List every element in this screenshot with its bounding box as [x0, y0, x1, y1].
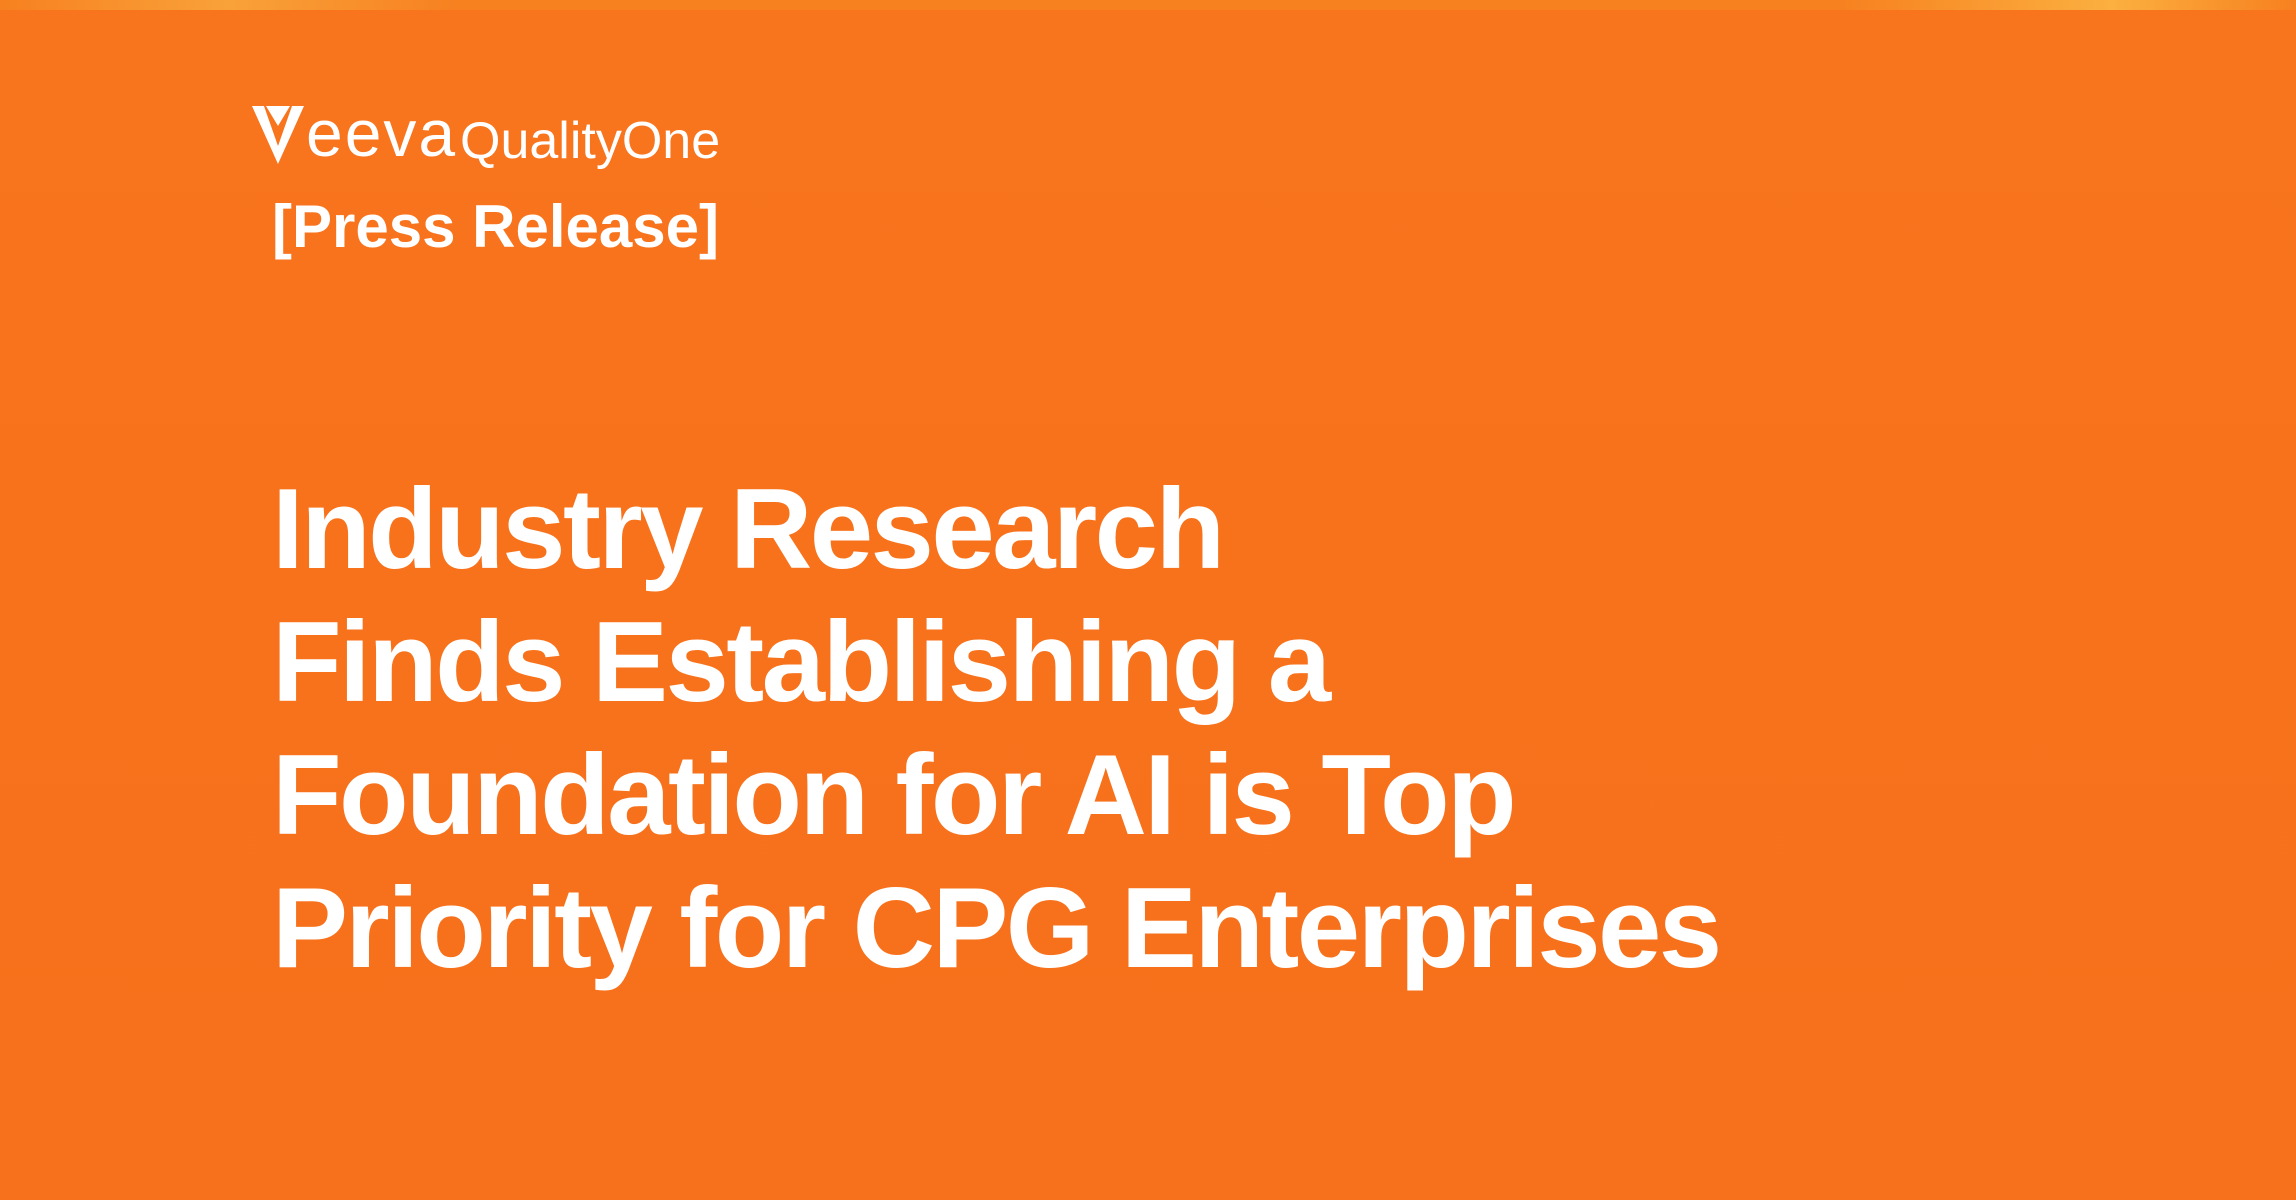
- label: [Press Release]: [Press Release]: [272, 193, 719, 260]
- title: Priority for CPG Enterprises: [272, 865, 1720, 992]
- title: Industry Research: [272, 466, 1223, 593]
- logo: Veeva QualityOne: QualityOne: [460, 112, 720, 170]
- title: Finds Establishing a: [272, 599, 1328, 726]
- title: [272, 466, 1720, 992]
- icon: veeva V mark: [252, 106, 304, 164]
- logo: Veeva QualityOne: [252, 104, 720, 170]
- title: Foundation for AI is Top: [272, 732, 1514, 859]
